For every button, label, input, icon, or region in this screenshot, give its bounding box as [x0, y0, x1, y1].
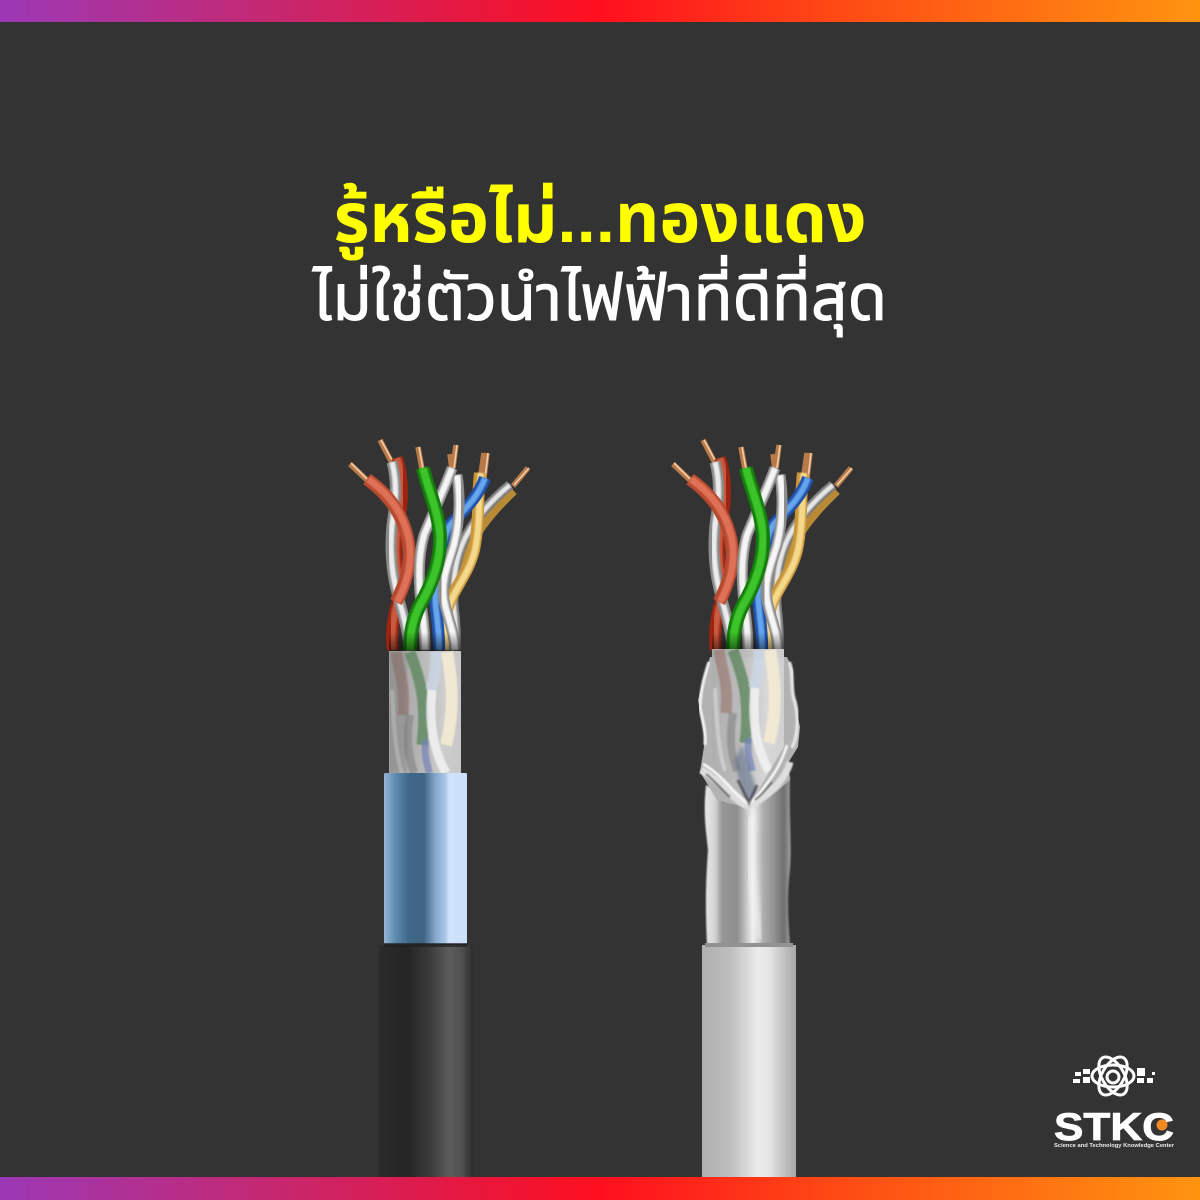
logo side pixels [1073, 1068, 1155, 1083]
right cable: foil shielded, grey jacket [673, 440, 852, 1177]
logo wordmark: STKC [1054, 1106, 1174, 1149]
logo subtitle: Science and Technology Knowledge Center [1054, 1143, 1175, 1149]
bottom gradient bar [0, 1177, 1200, 1200]
left twisted wires [350, 440, 529, 652]
top gradient bar [0, 0, 1200, 22]
logo orange dot [1156, 1120, 1168, 1130]
title line 2: ไม่ใช่ตัวนำไฟฟ้าที่ดีที่สุด [313, 262, 887, 334]
left black outer jacket [379, 943, 473, 1177]
right twisted wires [673, 440, 852, 652]
left translucent shield [389, 651, 461, 773]
right foil soft highlights [749, 815, 760, 940]
right crumpled foil edges [698, 657, 800, 808]
right foil crumple ring [701, 745, 790, 806]
right foil body [705, 775, 791, 945]
right translucent shield [712, 649, 784, 809]
left cable: blue shielded, black jacket [350, 440, 529, 1177]
logo atom icon [1092, 1052, 1134, 1100]
right grey outer jacket [702, 943, 796, 1177]
left blue inner jacket [384, 773, 467, 944]
logo: STKC [1054, 1052, 1175, 1149]
title line 1: รู้หรือไม่...ทองแดง [334, 180, 866, 257]
